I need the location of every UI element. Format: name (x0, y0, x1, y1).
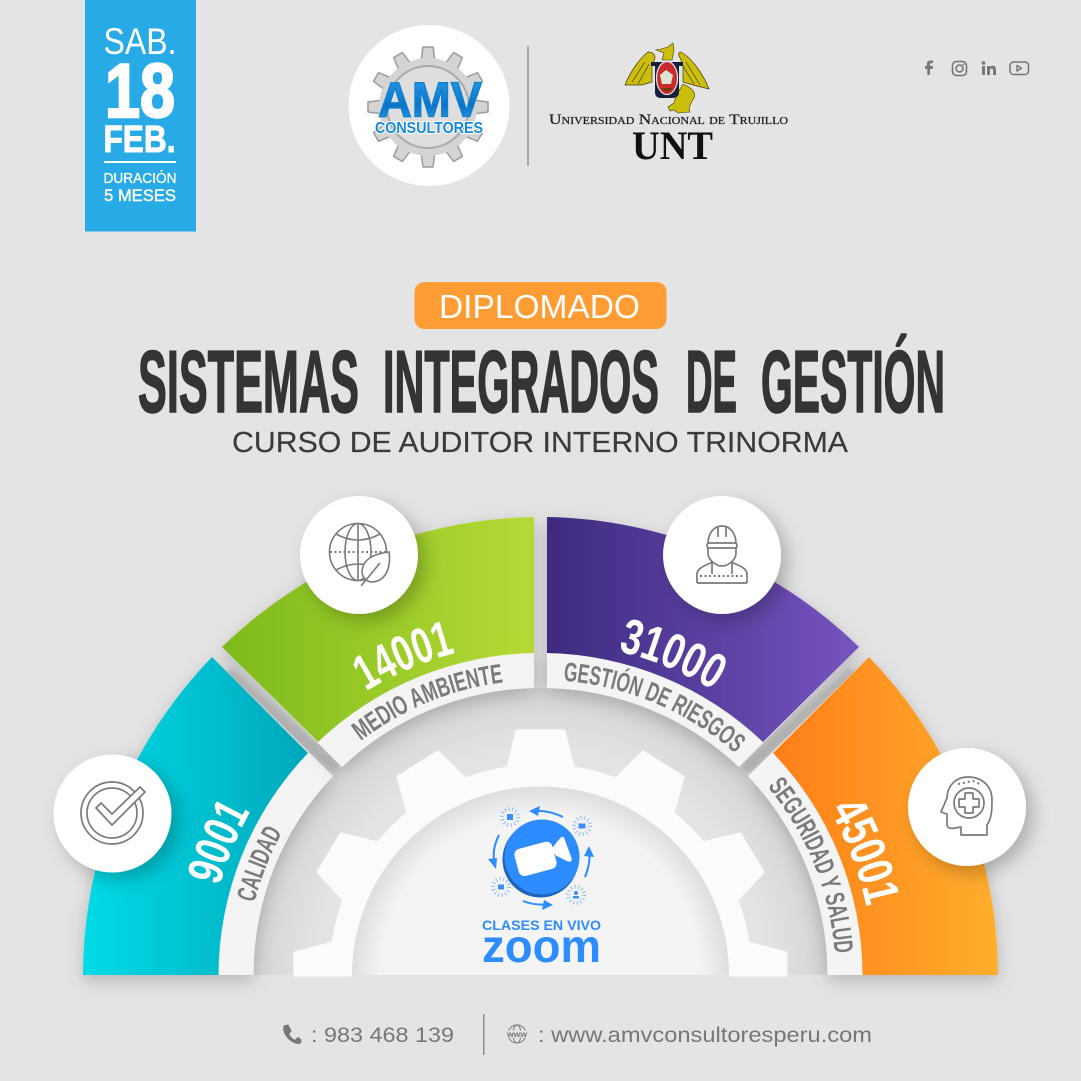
rotation arrows (494, 811, 590, 905)
date badge: FEB. (104, 119, 176, 161)
date badge: SAB. (104, 21, 176, 62)
date badge (85, 0, 196, 232)
university name: Universidad Nacional de Trujillo (549, 112, 788, 128)
segment: calidad (83, 657, 333, 975)
logo: AMV Consultores: AMV (378, 74, 482, 128)
zoom logo: CLASES EN VIVO (482, 917, 601, 933)
footer: phone: : 983 468 139 (311, 1024, 454, 1047)
label: gestion de riesgos: GESTIÓN DE RIESGOS (564, 662, 745, 752)
date badge: 5 MESES (104, 187, 176, 205)
date badge: DURACIÓN (104, 170, 176, 187)
segment: seguridad y salud (748, 657, 998, 975)
date badge: 18 (105, 49, 175, 134)
feature sparkles (493, 809, 590, 903)
label: 31000: 31000 (621, 620, 726, 687)
icon: worker (663, 496, 781, 614)
zoom logo (482, 806, 601, 972)
social icons (925, 60, 1028, 76)
label: seguridad y salud: SEGURIDAD Y SALUD (770, 777, 853, 952)
footer: website: www (506, 1030, 528, 1039)
title: SISTEMAS (138, 332, 359, 431)
icon: globe and leaf (300, 496, 418, 614)
icon: head with medical cross (908, 748, 1026, 866)
UNT wordmark: UNT (632, 123, 713, 168)
badge: diplomado (414, 282, 666, 329)
icon: check circle (54, 754, 172, 872)
title (138, 332, 945, 431)
segment: gestion de riesgos (547, 517, 859, 767)
label: 14001: 14001 (354, 622, 455, 690)
title: INTEGRADOS (383, 332, 659, 431)
inner disc (350, 785, 730, 975)
zoom logo: zoom (482, 920, 601, 972)
label: medio ambiente: MEDIO AMBIENTE (350, 664, 503, 740)
semicircular chart (76, 516, 1006, 989)
divider (527, 46, 529, 166)
label: 9001: 9001 (188, 801, 250, 882)
logo: UNT crest (625, 43, 709, 113)
label: 45001: 45001 (836, 804, 898, 906)
gear (295, 731, 786, 975)
logo: AMV Consultores: CONSULTORES (375, 120, 483, 137)
footer divider (483, 1014, 484, 1055)
label: calidad: CALIDAD (238, 826, 280, 900)
logo: AMV Consultores (348, 25, 510, 186)
badge: diplomado: DIPLOMADO (439, 289, 640, 326)
camera (513, 837, 571, 877)
footer: website: : www.amvconsultoresperu.com (538, 1024, 872, 1047)
segment: medio ambiente (222, 517, 534, 767)
title: DE (686, 332, 737, 431)
subtitle: CURSO DE AUDITOR INTERNO TRINORMA (232, 427, 849, 459)
